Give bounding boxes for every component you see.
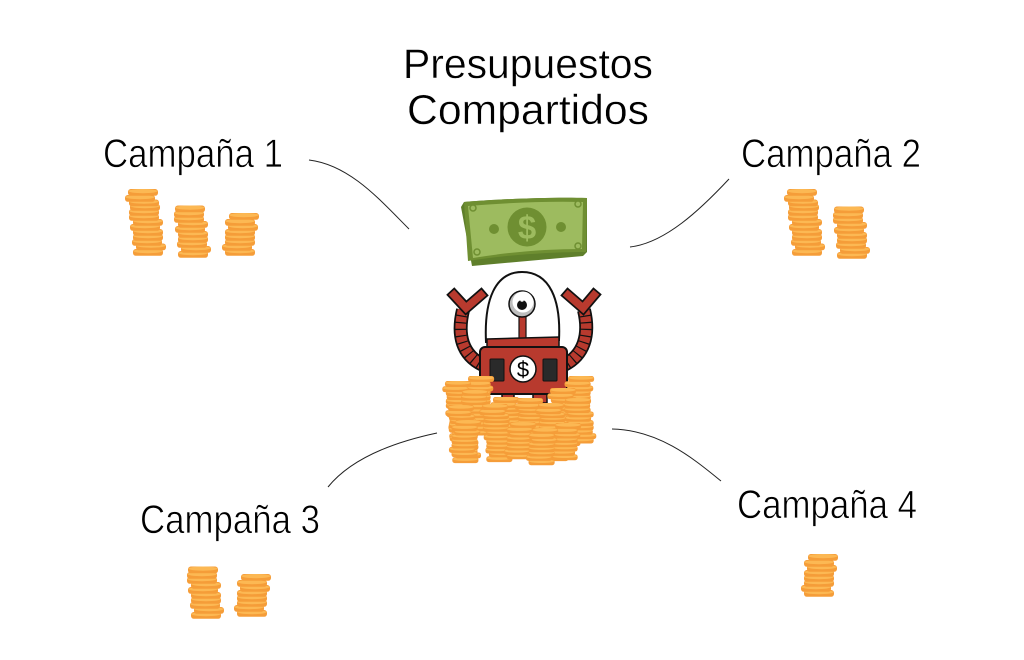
dollar badge: $: [517, 357, 529, 382]
left arm: [454, 295, 483, 365]
connector lines from robot to campaigns: [309, 160, 729, 487]
title: [403, 40, 653, 133]
label: Campaña 3: Campaña 3: [140, 498, 320, 542]
body: [480, 347, 567, 394]
robot legs: [502, 388, 547, 403]
title: Presupuestos: [403, 40, 653, 87]
coins: Campaña 4: [801, 554, 838, 597]
icon: dollar bill: $: [518, 209, 536, 246]
stem: [519, 314, 526, 340]
eye: [509, 291, 535, 317]
windows: [490, 359, 557, 381]
label: Campaña 1: Campaña 1: [103, 132, 283, 176]
central coin pile: [442, 376, 596, 465]
collar: [487, 337, 559, 351]
coins: Campaña 2: [784, 189, 870, 259]
label: Campaña 4: Campaña 4: [737, 483, 917, 527]
dome: [486, 272, 559, 342]
title: Compartidos: [407, 86, 649, 133]
right arm: [564, 295, 594, 365]
coins: Campaña 3: [187, 566, 271, 619]
icon: dollar bill: [461, 198, 587, 266]
icon: robot: [454, 272, 594, 403]
coins: Campaña 1: [125, 189, 259, 258]
label: Campaña 2: Campaña 2: [741, 132, 921, 176]
